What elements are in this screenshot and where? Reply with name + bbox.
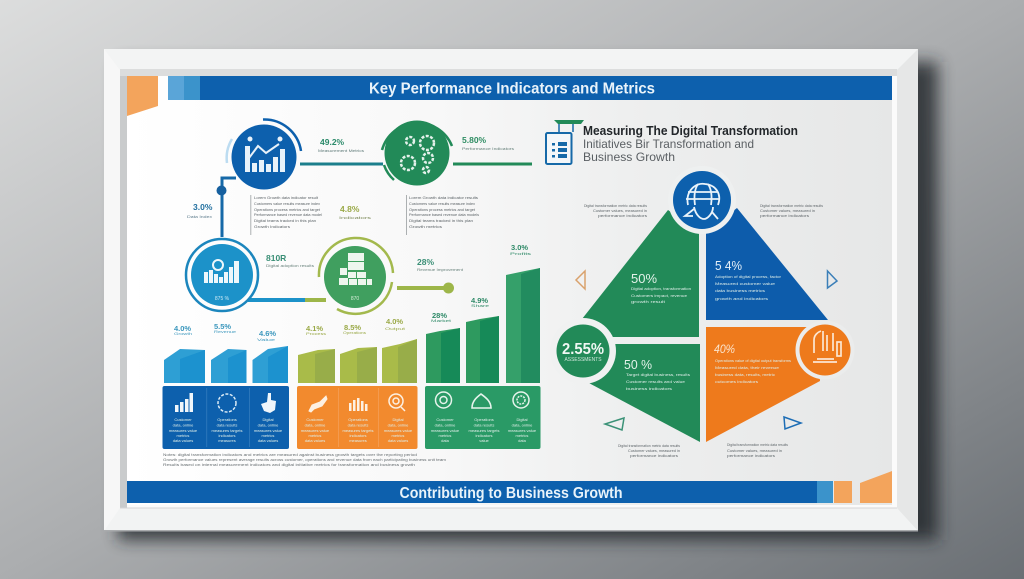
footnote text (163, 453, 446, 467)
panel: green metric cards: Digital (516, 417, 528, 422)
panel: blue metric cards: metrics (262, 433, 274, 438)
panel: orange metric cards: indicators (349, 433, 367, 438)
bar value labels: Process (306, 332, 326, 336)
caption: bottom left: Digital transformation metric data results (618, 444, 680, 448)
icon: money bag (472, 394, 491, 408)
text block 1: Lorem Growth data indicator result (254, 195, 319, 200)
bar value labels: Value (257, 338, 275, 342)
quadrant text: top left: 50% (631, 271, 657, 286)
bar value labels: 4.9% (471, 296, 488, 305)
quadrant: orange bottom right (706, 327, 820, 442)
panel: orange metric cards: measures targets (343, 428, 373, 433)
KPI labels: 4.8% (340, 204, 360, 214)
text block 2: Operations process metrics and target (409, 207, 476, 212)
bar value labels: Growth (174, 332, 192, 336)
text block 1 (250, 195, 322, 235)
stat circle: 2.55%: ASSESSMENTS (564, 357, 602, 363)
panel: blue metric cards: data, online (173, 422, 194, 428)
caption: bottom right: Customer values, measured in (727, 449, 782, 453)
caption: bottom left: Customer values, measured in (628, 449, 680, 453)
bar value labels: Operations (343, 331, 366, 335)
caption: top right: Digital transformation metric data results (760, 204, 823, 208)
header banner (127, 76, 892, 116)
panel: green metric cards: metrics (439, 433, 451, 438)
bar chart: olive (298, 339, 417, 383)
KPI labels: Revenue Improvement (417, 268, 464, 272)
decorative arrow: blue right (828, 271, 837, 288)
KPI labels: Digital adoption results (266, 264, 314, 268)
icon: ring leaf (436, 392, 452, 408)
panel: orange metric cards: data values (388, 438, 408, 443)
panel: green metric cards: measures value (431, 428, 460, 433)
panel: diamond quadrants (550, 166, 854, 442)
bar value labels (174, 243, 531, 342)
text block 1: Performance based revenue data model (254, 212, 322, 217)
caption: top left (584, 204, 647, 218)
icon: tools (309, 396, 327, 412)
quadrant text: bottom left: Target digital business, results (626, 372, 690, 377)
quadrant text: bottom right: 40% (714, 342, 735, 356)
quadrant text: bottom left: Customer results and value (626, 379, 686, 384)
KPI labels: 810R (266, 253, 286, 263)
quadrant text: top right (715, 258, 782, 301)
KPI node: green boxes (319, 238, 393, 314)
panel: blue metric cards: Digital (262, 417, 274, 422)
panel: blue metric cards (162, 386, 289, 449)
bar value labels: Output (385, 327, 407, 331)
footnote text: Results based on internal measurement indicators and digital initiative metrics for transformation and business growth (163, 463, 415, 467)
panel: green metric cards: data, online (435, 422, 456, 428)
connector lines (222, 164, 532, 300)
panel: green metric cards: data results (474, 422, 494, 428)
footer title: Contributing to Business Growth (400, 485, 622, 502)
quadrant text: top left: Customers impact, revenue (631, 293, 688, 298)
stat circle: 2.55% (556, 324, 610, 378)
bar value labels: 8.5% (344, 323, 361, 332)
quadrant text: top left: Digital adoption, transformation (631, 286, 691, 291)
bar value labels: 4.0% (386, 317, 403, 326)
heading: measuring digital transformation: Business Growth (583, 150, 675, 164)
icon: cycle (218, 394, 236, 412)
panel: orange metric cards: metrics (309, 433, 321, 438)
icon: signal bars (175, 393, 193, 412)
right circle gap (796, 320, 854, 380)
text block 1: Customers value results measure index (254, 201, 320, 206)
icon: magnifier (389, 394, 405, 411)
panel: orange metric cards: data, online (388, 422, 409, 428)
caption: top left: Customer values, measured in (593, 209, 647, 213)
panel: orange metric cards: Operations (348, 417, 368, 422)
KPI labels: Performance Indicators (462, 147, 514, 151)
bar value labels: Market (431, 319, 453, 323)
KPI labels: 5.80% (462, 135, 487, 145)
text block 1: Digital teams tracked in this plan (254, 218, 316, 223)
bar value labels: 3.0% (511, 243, 528, 252)
bar value labels: 4.0% (174, 324, 191, 333)
caption: top right: performance indicators (760, 214, 809, 218)
panel: green metric cards (425, 386, 540, 449)
text block 1: Operations process metrics and target (254, 207, 321, 212)
KPI labels: 3.0% (193, 202, 213, 212)
icon: hand (261, 393, 276, 413)
decorative arrow: blue right lower (784, 417, 801, 429)
bar value labels: Profits (510, 252, 531, 256)
KPI labels: Measurement Metrics (318, 149, 364, 153)
panel: orange metric cards: Digital (392, 417, 404, 422)
panel: green metric cards: metrics (516, 433, 528, 438)
picture frame (104, 49, 918, 532)
panel: orange metric cards: data values (305, 438, 325, 443)
caption: top left: Digital transformation metric data results (584, 204, 647, 208)
KPI node: light blue growth (186, 239, 258, 311)
footnote text: Growth performance values represent average results across customer, operations and revenue data from each participating business unit team (163, 458, 446, 462)
node caption: 875 % (215, 296, 230, 302)
quadrant: green top left (582, 210, 699, 337)
panel: green metric cards: data, online (512, 422, 533, 428)
top circle gap (668, 166, 736, 234)
quadrant text: top right: data business metrics (715, 288, 765, 293)
text block 2 (406, 195, 479, 235)
panel: green metric cards: indicators (475, 433, 493, 438)
panel: blue metric cards: data values (173, 438, 193, 443)
panel: green metric cards: measures value (508, 428, 537, 433)
text block 2: Performance based revenue data models (409, 212, 479, 217)
heading: measuring digital transformation: Measuring The Digital Transformation (583, 123, 798, 138)
bar value labels: 5.5% (214, 322, 231, 331)
icon: orange lab circle (800, 324, 850, 376)
stat circle: 2.55%: 2.55% (562, 341, 604, 358)
footnote text: Notes: digital transformation indicators and metrics are measured against business growth targets over the reporting period (163, 453, 417, 457)
panel: blue metric cards: data, online (258, 422, 279, 428)
panel: blue metric cards: metrics (177, 433, 189, 438)
text block 2: Growth metrics (409, 224, 442, 229)
caption: bottom left: performance indicators (630, 454, 678, 458)
panel: orange metric cards: metrics (392, 433, 404, 438)
bar value labels: 28% (432, 311, 447, 320)
caption: top right: Customer values, measured in (760, 209, 815, 213)
icon: globe ring (513, 392, 529, 408)
icon: measurement clipboard (546, 120, 584, 164)
bar value labels: 4.1% (306, 324, 323, 333)
quadrant text: bottom left: 50 % (624, 357, 652, 372)
frame shadow (118, 62, 938, 540)
bar chart: blue (164, 346, 288, 383)
panel: blue metric cards: Operations (217, 417, 237, 422)
footer banner (127, 471, 892, 503)
bar value labels: 4.6% (259, 329, 276, 338)
quadrant text: bottom right (714, 342, 791, 384)
icon: globe head circle (673, 171, 731, 229)
caption: bottom right (727, 443, 788, 458)
panel: green metric cards: value (479, 438, 490, 443)
decorative arrow: orange left (576, 271, 585, 289)
panel: orange metric cards: measures value (301, 428, 330, 433)
KPI labels (187, 135, 514, 272)
caption: bottom right: Digital transformation metric data results (727, 443, 788, 447)
quadrant text: bottom right: outcomes indicators (715, 379, 758, 384)
panel: orange metric cards: Customer (306, 417, 324, 422)
bar value labels: Revenue (214, 330, 236, 334)
quadrant text: bottom right: Measured data, their revenue (715, 365, 780, 370)
quadrant text: bottom right: Operations value of digital output transforms (715, 358, 791, 363)
panel: orange metric cards: data, online (305, 422, 326, 428)
text block 2: Customers value results measure index (409, 201, 475, 206)
caption: top left: performance indicators (598, 214, 647, 218)
quadrant text: top left (631, 271, 691, 304)
panel: orange metric cards: measures value (384, 428, 413, 433)
bar chart: green (426, 268, 540, 383)
heading: measuring digital transformation (583, 123, 798, 164)
panel: blue metric cards: indicators (218, 433, 236, 438)
panel: green metric cards: data (518, 438, 527, 443)
panel: blue metric cards: measures value (254, 428, 283, 433)
panel: orange metric cards: measures (349, 438, 367, 443)
KPI node: blue chart (227, 119, 301, 190)
KPI labels: Data Index (187, 215, 212, 219)
connector dots (216, 186, 454, 294)
panel: blue metric cards: data results (217, 422, 237, 428)
panel: blue metric cards: measures targets (212, 428, 242, 433)
panel: blue metric cards: data values (258, 438, 278, 443)
KPI node: green gears (382, 120, 452, 186)
quadrant text: bottom left (624, 357, 690, 391)
quadrant: green bottom (587, 344, 700, 442)
panel: green metric cards: Operations (474, 417, 494, 422)
text block 2: Digital teams tracked in this plan (409, 218, 473, 223)
quadrant text: top left: growth result (631, 299, 666, 304)
panel: blue metric cards: measures (218, 438, 236, 443)
panel: green metric cards: Customer (436, 417, 454, 422)
decorative arrow: green left (605, 418, 624, 430)
caption: bottom left (618, 444, 680, 458)
KPI labels: 49.2% (320, 137, 345, 147)
heading: measuring digital transformation: Initiatives Bir Transformation and (583, 137, 754, 151)
text block 2: Lorem Growth data indicator results (409, 195, 478, 200)
panel: blue metric cards: measures value (169, 428, 198, 433)
panel: green metric cards: data (441, 438, 450, 443)
quadrant text: top right: growth and indicators (715, 296, 768, 301)
left circle gap (550, 318, 616, 384)
bar value labels: Share (471, 304, 489, 308)
quadrant text: bottom right: business data, results, metric (715, 372, 775, 377)
icon: gears (401, 136, 434, 173)
quadrant text: top right: Adoption of digital process, factor (715, 274, 782, 279)
panel: blue metric cards: Customer (174, 417, 192, 422)
quadrant text: bottom left: business indicators (626, 386, 672, 391)
quadrant: blue top right (706, 208, 828, 320)
text block 1: Growth Indicators (254, 224, 290, 229)
quadrant text: top right: 5 4% (715, 258, 742, 273)
KPI labels: 28% (417, 257, 434, 267)
icon: factory chart (349, 398, 368, 411)
icon: bar chart with line (245, 136, 285, 172)
node caption: 870 (351, 296, 359, 302)
panel: orange metric cards: data results (348, 422, 368, 428)
panel: green metric cards: measures targets (469, 428, 499, 433)
title: Key Performance Indicators and Metrics (369, 80, 655, 98)
panel: orange metric cards (297, 386, 418, 449)
quadrant text: top right: Measured customer value (715, 281, 776, 286)
KPI labels: Indicators (339, 216, 371, 220)
poster panel (127, 76, 892, 505)
caption: top right (760, 204, 823, 218)
caption: bottom right: performance indicators (727, 454, 775, 458)
icon: rising bars (204, 260, 239, 283)
icon: stacked boxes (339, 253, 372, 285)
